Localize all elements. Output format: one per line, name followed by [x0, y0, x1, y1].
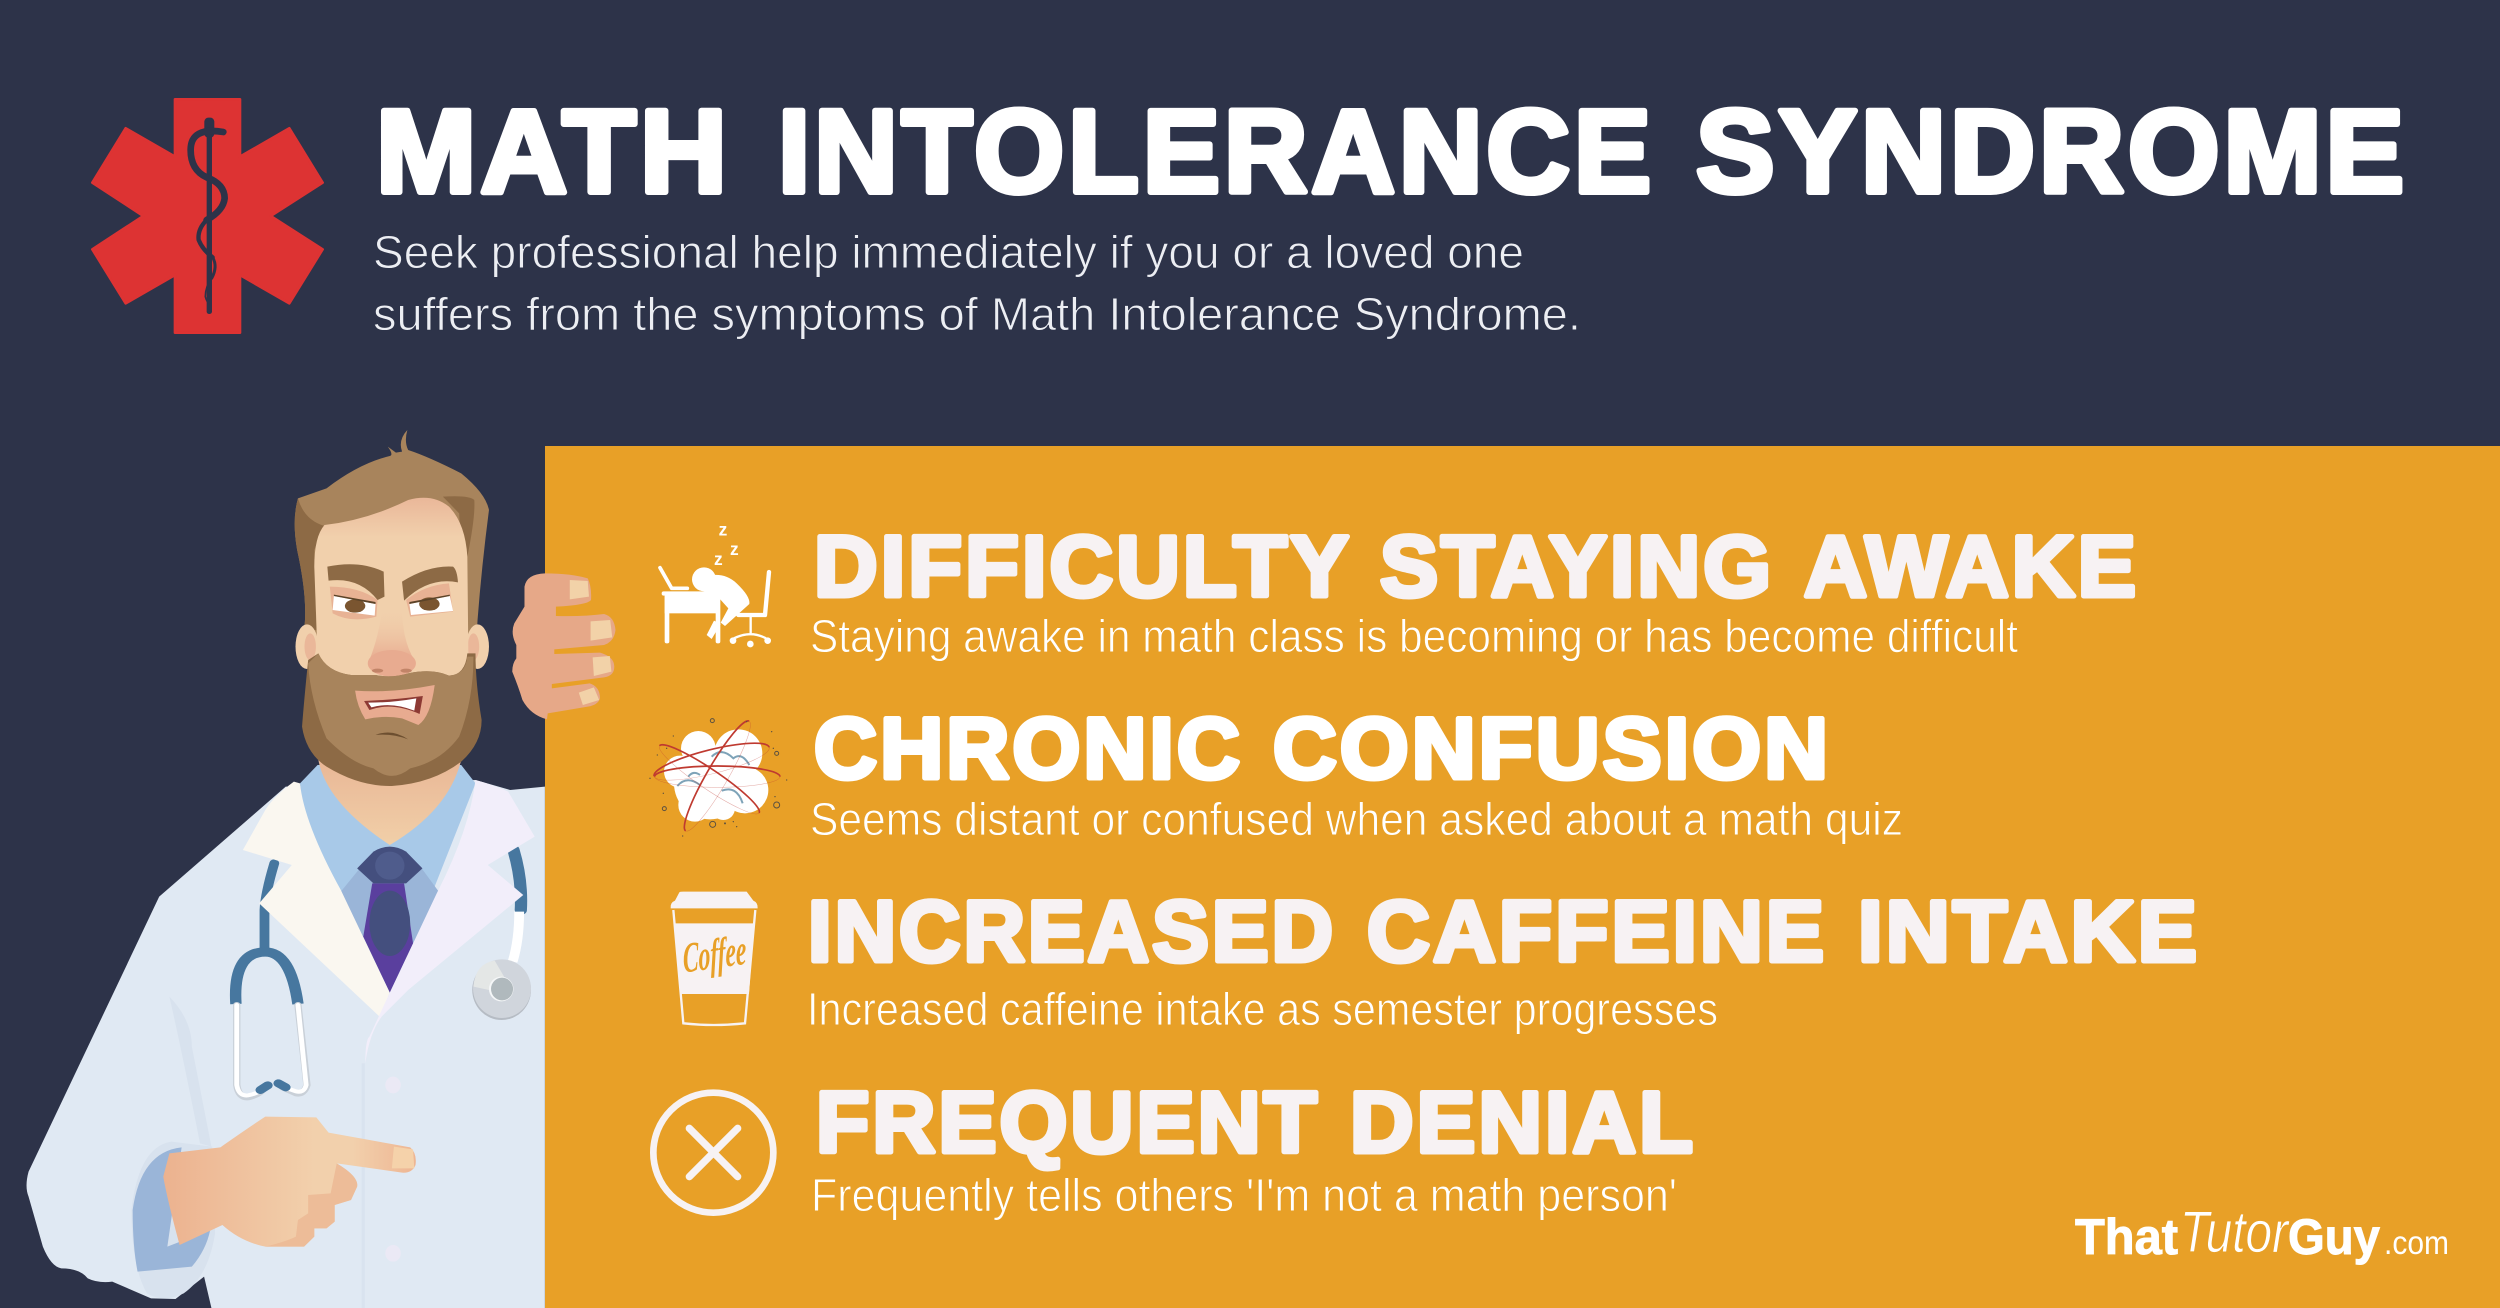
- logo: ThatTutorGuy.com: Tutor: [2180, 1200, 2290, 1265]
- logo: ThatTutorGuy.com: That: [2075, 1209, 2178, 1265]
- icon: sleeping at desk: [660, 519, 771, 647]
- hair shading: [295, 496, 474, 630]
- icon: coffee cup: [671, 892, 758, 1025]
- illustration: doctor: [27, 430, 545, 1308]
- collar right: [365, 780, 535, 1063]
- heading: FREQUENT: [816, 1075, 1320, 1171]
- heading: [814, 519, 2139, 615]
- tie: [341, 847, 439, 993]
- heading: DIFFICULTY: [814, 519, 1352, 615]
- panel: symptoms: [545, 446, 2500, 1308]
- description: Increased caffeine intake as semester progresses: [807, 983, 1718, 1035]
- description: Staying awake in math class is becoming or has become difficult: [810, 610, 2018, 662]
- description: Seems distant or confused when asked about a math quiz: [810, 793, 1903, 845]
- heading: CONFUSION: [1273, 701, 1831, 797]
- hair: [295, 430, 489, 657]
- logo: ThatTutorGuy.com: [2075, 1200, 2449, 1265]
- shirt cuff and coat cuff: [131, 1142, 215, 1298]
- heading: [816, 1075, 1696, 1171]
- symptom 1: difficulty staying awake: [660, 519, 2139, 662]
- heading: CAFFEINE: [1367, 884, 1827, 980]
- title: [376, 86, 2408, 218]
- pointing hand: [163, 1117, 416, 1247]
- eyes: [330, 583, 453, 619]
- title: INTOLERANCE: [778, 86, 1655, 218]
- face: [314, 498, 469, 677]
- chestpiece: [472, 959, 531, 1020]
- symptom 4: frequent denial: [653, 1075, 1696, 1221]
- subtitle: [373, 226, 1581, 340]
- beard: [302, 653, 482, 786]
- collar left: [243, 782, 390, 1017]
- icon: sleeping at desk: z: [730, 539, 739, 559]
- icon: confused cloud: [649, 716, 787, 837]
- icon: circled x: [653, 1093, 773, 1213]
- description: Frequently tells others 'I'm not a math person': [811, 1169, 1677, 1221]
- heading: [808, 884, 2200, 980]
- shirt: [300, 765, 476, 1000]
- heading: INCREASED: [808, 884, 1336, 980]
- heading: [814, 701, 1831, 797]
- title: MATH: [376, 86, 731, 218]
- heading: INTAKE: [1858, 884, 2200, 980]
- title: SYNDROME: [1696, 86, 2408, 218]
- nose: [368, 607, 416, 677]
- heading: DENIAL: [1350, 1075, 1696, 1171]
- icon: coffee cup: Coffee: [682, 927, 747, 983]
- eyebrows: [327, 564, 458, 601]
- icon: sleeping at desk: z: [719, 519, 728, 539]
- stethoscope: [236, 850, 521, 1097]
- buttons: [385, 1077, 401, 1262]
- icon: sleeping at desk: z: [714, 549, 723, 569]
- logo: ThatTutorGuy.com: .com: [2384, 1224, 2449, 1261]
- coat and body: [27, 760, 545, 1308]
- symptom 2: chronic confusion: [649, 701, 1903, 845]
- illustration: hand gripping the panel: [512, 573, 616, 719]
- logo: ThatTutorGuy.com: Guy: [2288, 1209, 2380, 1265]
- heading: STAYING: [1380, 519, 1774, 615]
- subtitle: suffers from the symptoms of Math Intolerance Syndrome.: [373, 288, 1581, 340]
- mouth: [355, 685, 435, 739]
- neck: [318, 760, 461, 845]
- heading: CHRONIC: [814, 701, 1243, 797]
- symptom 3: increased caffeine intake: [671, 884, 2200, 1035]
- icon: star of life: [92, 99, 323, 333]
- heading: AWAKE: [1804, 519, 2139, 615]
- subtitle: Seek professional help immediately if you or a loved one: [373, 226, 1524, 278]
- ears: [296, 624, 489, 669]
